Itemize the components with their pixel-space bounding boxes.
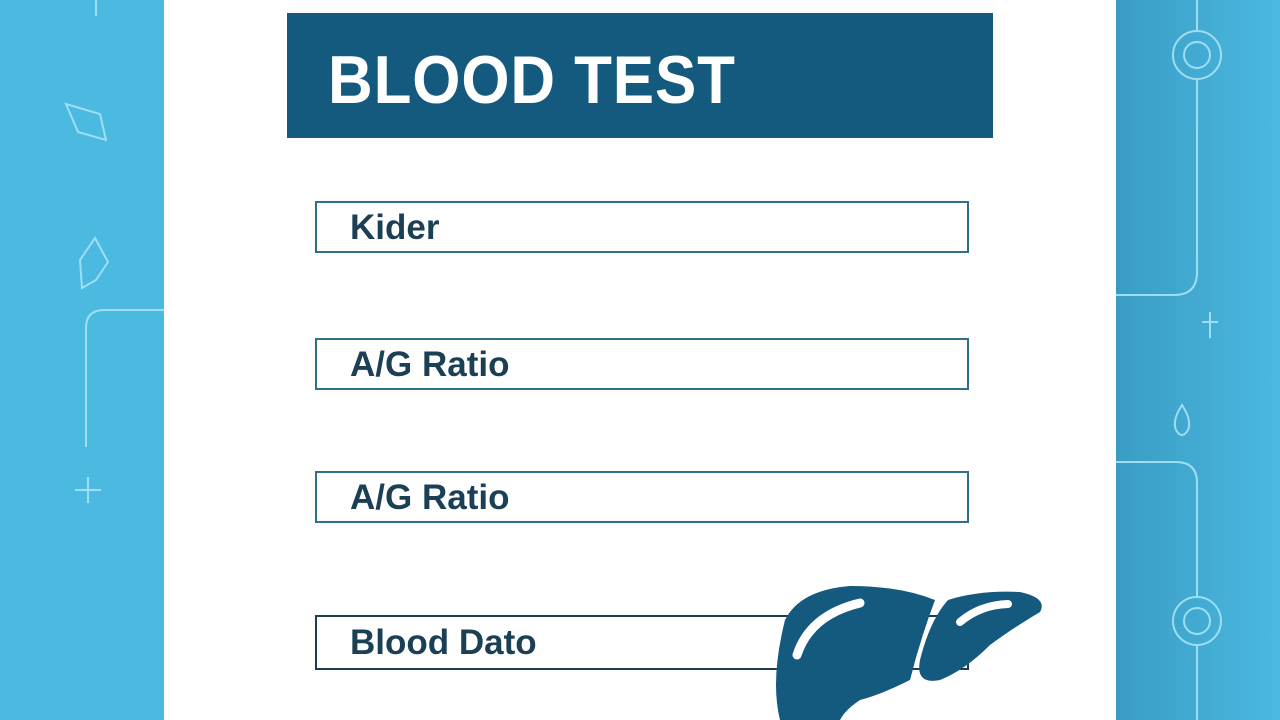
title banner — [287, 13, 993, 138]
field: Blood Dato — [315, 615, 969, 670]
field: A/G Ratio second: A/G Ratio — [350, 478, 509, 517]
field: A/G Ratio second — [315, 471, 969, 523]
field: Blood Dato: Blood Dato — [350, 623, 537, 662]
white panel — [164, 0, 1116, 720]
title banner: BLOOD TEST — [328, 42, 736, 118]
field: A/G Ratio — [315, 338, 969, 390]
icon: liver — [776, 586, 1042, 720]
field: Kider — [315, 201, 969, 253]
field: A/G Ratio: A/G Ratio — [350, 345, 509, 384]
field: Kider: Kider — [350, 208, 439, 247]
